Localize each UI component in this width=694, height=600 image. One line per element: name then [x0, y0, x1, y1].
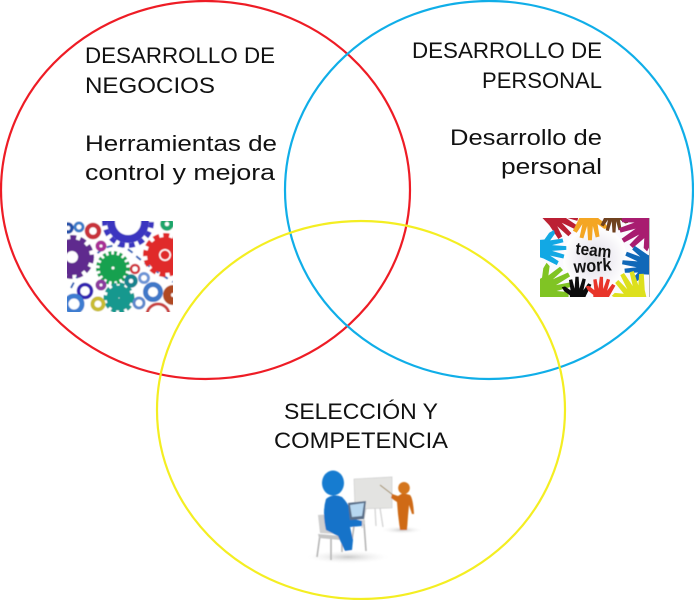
text block: business development: DESARROLLO DE [85, 43, 275, 68]
whiteboard [354, 477, 392, 528]
circle: red, business development [1, 1, 410, 379]
text block: personnel development [412, 38, 602, 179]
text block: selection and competence [274, 399, 448, 453]
label: team work [573, 243, 612, 273]
text block: business development: Herramientas de [85, 131, 277, 156]
text block: selection and competence: SELECCIÓN Y [284, 399, 438, 424]
icon: colourful gears [67, 221, 173, 312]
text block: selection and competence: COMPETENCIA [274, 428, 448, 453]
text block: personnel development: personal [501, 154, 602, 179]
label: team work: work [572, 254, 613, 277]
circle: yellow, selection and competence [157, 221, 565, 599]
text block: personnel development: DESARROLLO DE [412, 38, 602, 63]
text block: business development: control y mejora [85, 160, 276, 185]
circle: blue, personnel development [285, 1, 693, 379]
icon: teamwork hands [540, 218, 650, 297]
text block: personnel development: Desarrollo de [450, 125, 602, 150]
presenter [380, 482, 414, 530]
text block: business development [85, 43, 277, 185]
label: team work: team [575, 239, 612, 262]
text block: business development: NEGOCIOS [85, 73, 215, 98]
icon: training presenter and student [303, 470, 424, 564]
student at laptop [317, 470, 366, 560]
text block: personnel development: PERSONAL [482, 68, 602, 93]
